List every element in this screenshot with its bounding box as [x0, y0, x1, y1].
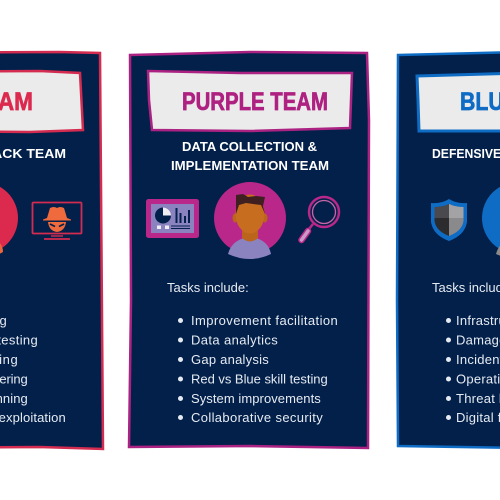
purple tasks label: Tasks include: [167, 280, 249, 295]
purple task list: Collaborative security [191, 410, 323, 425]
purple title box [148, 71, 352, 131]
avatar hair [236, 194, 265, 214]
icon: analytics tablet [146, 199, 199, 238]
avatar face [236, 194, 264, 234]
purple task list: Red vs Blue skill testing [191, 372, 328, 386]
red card background [0, 52, 103, 449]
red task list [0, 313, 66, 425]
purple task list: System improvements [191, 391, 321, 406]
purple card background [129, 52, 369, 448]
purple subtitle: IMPLEMENTATION TEAM [171, 158, 329, 173]
purple subtitle [171, 139, 329, 173]
blue card background [397, 52, 500, 449]
red avatar [0, 182, 18, 260]
blue avatar [482, 182, 500, 259]
purple task list: Data analytics [191, 332, 278, 347]
blue title box [417, 73, 500, 131]
red title box [0, 71, 83, 132]
purple task list: Improvement facilitation [191, 313, 338, 328]
panel: purple team [129, 52, 369, 448]
purple title: PURPLE TEAM [182, 88, 328, 116]
icon: magnifying glass [302, 197, 339, 240]
purple task list [178, 313, 338, 425]
blue task list [446, 313, 500, 425]
avatar ears [232, 214, 268, 222]
purple avatar [214, 182, 286, 259]
icon: hacker monitor [32, 202, 82, 239]
avatar circle [214, 182, 286, 254]
avatar shoulders [228, 237, 271, 259]
icon: shield [431, 199, 467, 241]
panel: blue team [397, 52, 500, 449]
avatar neck [242, 225, 258, 242]
purple task list: Gap analysis [191, 352, 269, 367]
panel: red team [0, 52, 103, 449]
purple subtitle: DATA COLLECTION & [182, 139, 317, 154]
